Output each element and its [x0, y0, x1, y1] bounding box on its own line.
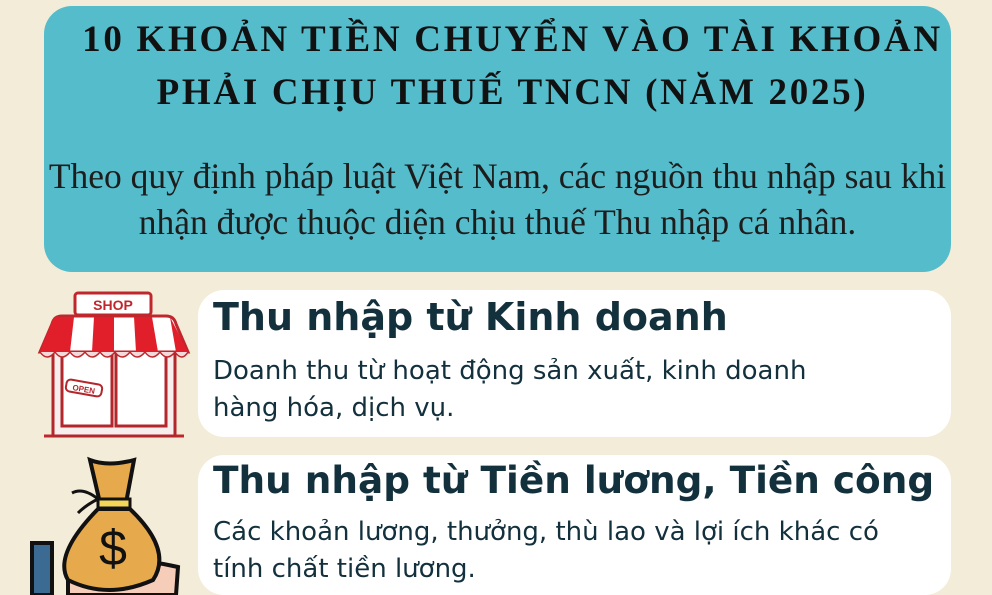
text: Các khoản lương, thưởng, thù lao và lợi ích khác có: [213, 517, 879, 547]
text: [213, 517, 879, 584]
card: tiền lương: [198, 455, 951, 595]
icon: money bag: $: [99, 520, 127, 576]
header panel: [44, 6, 951, 272]
icon: shop: SHOP: [93, 297, 133, 313]
heading: Thu nhập từ Tiền lương, Tiền công: [213, 458, 934, 502]
subtitle: nhận được thuộc diện chịu thuế Thu nhập cá nhân.: [139, 202, 856, 242]
icon: shop: [38, 292, 190, 438]
heading: Thu nhập từ Kinh doanh: [213, 295, 728, 339]
text: hàng hóa, dịch vụ.: [213, 393, 454, 423]
text: Doanh thu từ hoạt động sản xuất, kinh doanh: [213, 356, 806, 386]
text: tính chất tiền lương.: [213, 554, 476, 584]
title: [82, 18, 943, 113]
subtitle: [49, 156, 946, 242]
subtitle: Theo quy định pháp luật Việt Nam, các nguồn thu nhập sau khi: [49, 156, 946, 196]
text: [213, 356, 806, 423]
title: PHẢI CHỊU THUẾ TNCN (NĂM 2025): [157, 72, 868, 113]
card: kinh doanh: [198, 290, 951, 437]
title: 10 KHOẢN TIỀN CHUYỂN VÀO TÀI KHOẢN: [82, 19, 943, 60]
icon: money bag: [30, 456, 180, 595]
icon: shop: OPEN: [72, 383, 96, 396]
